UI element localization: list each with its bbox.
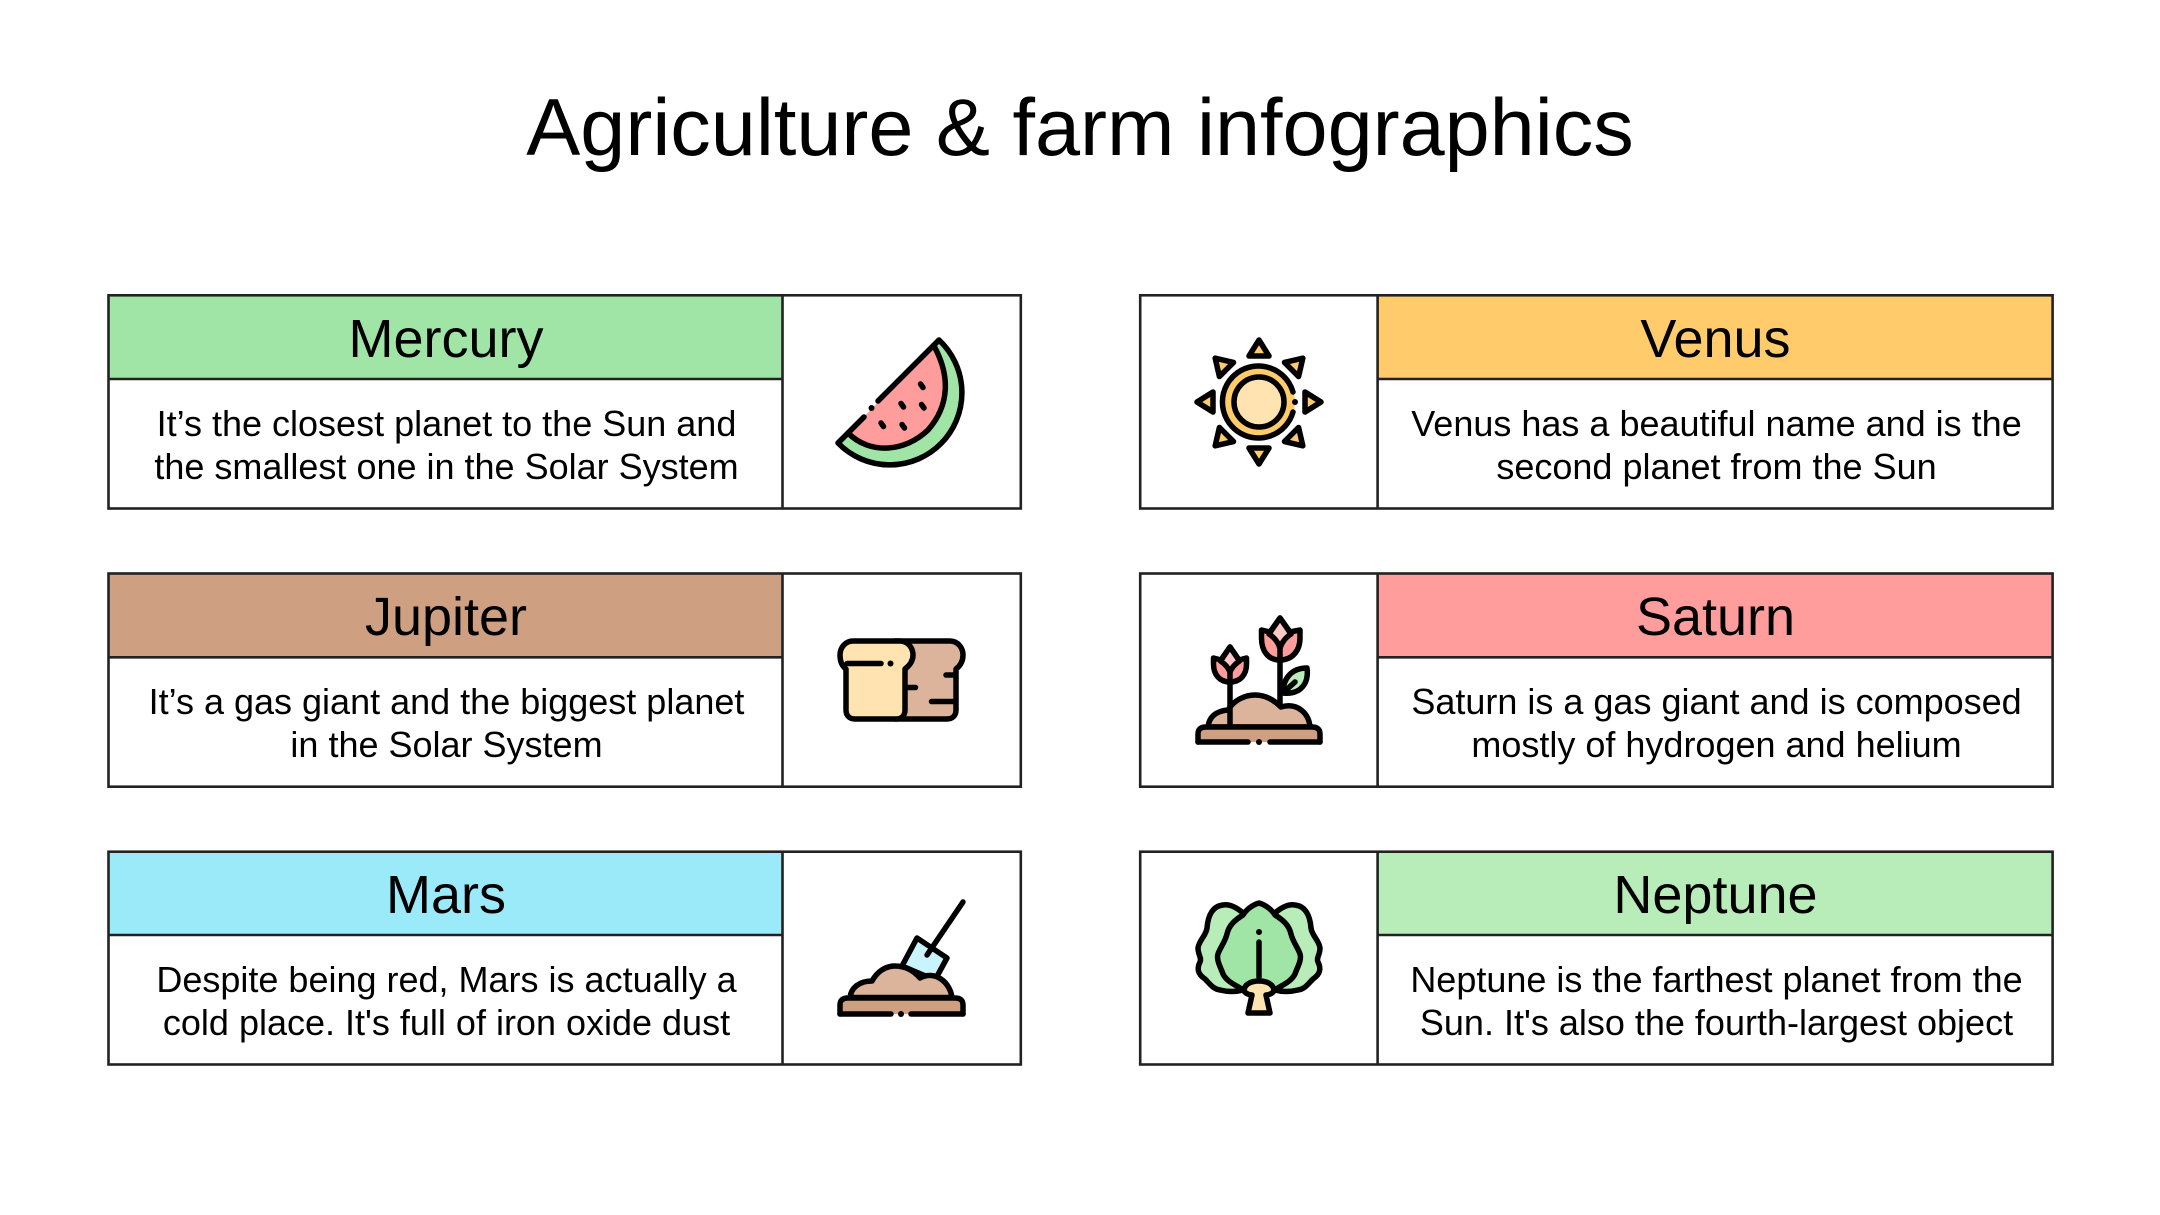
text: Mercury description (154, 403, 739, 487)
text: Saturn description (1411, 681, 2022, 765)
icon cell: watermelon (835, 337, 965, 468)
text: Mars description (156, 959, 737, 1043)
text: Saturn description: mostly of hydrogen and helium (1471, 724, 1962, 765)
text: Mercury description: It’s the closest planet to the Sun and (157, 403, 736, 444)
text: Venus description: second planet from the Sun (1496, 446, 1937, 487)
panel: Mercury (108, 295, 1021, 509)
icon cell: lettuce (1195, 900, 1323, 1016)
icon: watermelon (838, 340, 962, 465)
panel: Venus (1140, 295, 2053, 509)
icon cell: shovel (837, 899, 966, 1017)
text: Mars description: Despite being red, Mars is actually a (156, 959, 737, 1000)
text: Neptune description (1410, 959, 2023, 1043)
heading: Saturn: Saturn (1636, 587, 1795, 647)
text: Jupiter description: in the Solar System (290, 724, 603, 765)
panel: Neptune (1140, 851, 2053, 1065)
icon cell: sun (1194, 337, 1324, 467)
icon: shovel in soil (840, 902, 963, 1017)
panel: Mars (108, 851, 1021, 1065)
heading: Mars (108, 851, 783, 935)
heading: Venus: Venus (1640, 309, 1791, 369)
icon: flowers in soil (1198, 618, 1320, 745)
heading: Jupiter (108, 573, 783, 657)
text: Saturn description: Saturn is a gas giant and is composed (1411, 681, 2022, 722)
icon: lettuce (1198, 903, 1320, 1013)
text: Neptune description: Sun. It's also the fourth-largest object (1420, 1002, 2013, 1043)
text: Neptune description: Neptune is the farthest planet from the (1410, 959, 2023, 1000)
icon cell: flowers (1195, 615, 1323, 745)
title: Agriculture & farm infographics (526, 83, 1634, 173)
heading: Mercury (108, 295, 783, 379)
heading: Neptune: Neptune (1613, 865, 1818, 925)
text: Jupiter description (149, 681, 744, 765)
right tulip (1262, 618, 1300, 660)
text: Venus description (1411, 403, 2022, 487)
text: Mercury description: the smallest one in the Solar System (154, 446, 739, 487)
panel: Saturn (1140, 573, 2053, 787)
icon cell: bread (837, 638, 966, 722)
text: Jupiter description: It’s a gas giant and the biggest planet (149, 681, 744, 722)
heading: Venus (1378, 295, 2053, 379)
heading: Mars: Mars (386, 865, 506, 925)
heading: Mercury: Mercury (348, 309, 544, 369)
heading: Neptune (1378, 851, 2053, 935)
icon: sun (1197, 340, 1321, 464)
left tulip (1214, 647, 1246, 682)
heading: Jupiter: Jupiter (365, 587, 527, 647)
heading: Saturn (1378, 573, 2053, 657)
text: Mars description: cold place. It's full of iron oxide dust (163, 1002, 730, 1043)
panel: Jupiter (108, 573, 1021, 787)
text: Venus description: Venus has a beautiful name and is the (1411, 403, 2022, 444)
icon: bread (840, 641, 963, 719)
